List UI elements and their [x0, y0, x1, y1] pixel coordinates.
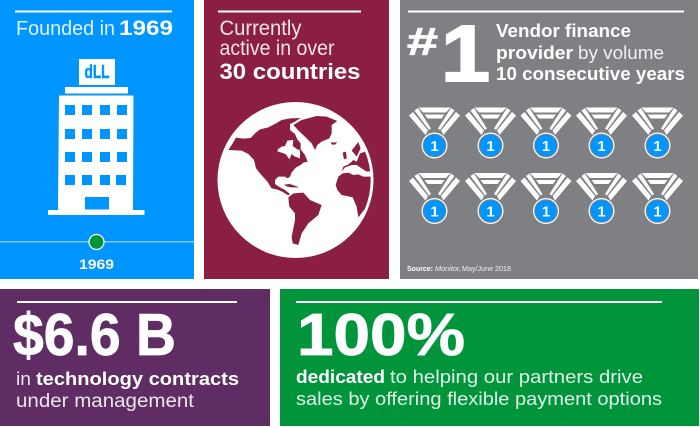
icon: building with logo	[48, 59, 144, 215]
heading: founded in 1969	[16, 16, 173, 40]
medal 9	[576, 173, 627, 224]
timeline marker	[0, 234, 194, 250]
big number: 6.6 billion: $6.6 B	[13, 302, 176, 368]
timeline year: 1969	[79, 256, 114, 272]
icon: building with logo: dLL	[84, 62, 110, 82]
medal 1	[409, 108, 460, 158]
large number one: #	[407, 21, 438, 64]
medal 4: 1	[597, 138, 606, 155]
heading: currently active in over 30 countries: active in over	[220, 37, 334, 60]
large number one	[407, 9, 490, 98]
heading: currently active in over 30 countries: 30 countries	[220, 59, 360, 84]
text: technology contracts under management: technology contracts	[36, 368, 239, 389]
source note	[407, 266, 511, 273]
text: dedicated to helping partners: sales by offering flexible payment options	[296, 388, 662, 409]
medal 4	[576, 108, 627, 158]
text: vendor finance provider: provider	[496, 43, 573, 63]
source note: Source:	[407, 266, 433, 273]
text: vendor finance provider: by volume	[578, 43, 664, 63]
medal 2: 1	[486, 138, 495, 155]
panel: 100 percent dedicated	[280, 289, 699, 426]
panel: active in 30 countries	[204, 0, 389, 279]
text: vendor finance provider: Vendor finance	[496, 21, 631, 41]
source note: Monitor,	[435, 266, 461, 273]
panel: technology contracts	[0, 289, 270, 426]
medal 8	[520, 173, 572, 224]
heading: currently active in over 30 countries	[220, 17, 360, 84]
medal 5	[632, 108, 683, 158]
text: dedicated to helping partners: dedicated	[296, 366, 385, 387]
medal 8: 1	[542, 204, 550, 220]
medal 6: 1	[430, 204, 439, 220]
text: dedicated to helping partners: to helping our partners drive	[390, 366, 643, 387]
medal 5: 1	[653, 138, 662, 155]
medal 2	[465, 108, 516, 158]
text: technology contracts under management: under management	[16, 391, 195, 412]
source note: May/June 2018	[462, 266, 511, 273]
medal 9: 1	[597, 204, 606, 220]
medal 6	[409, 173, 460, 224]
medal 3: 1	[542, 138, 550, 155]
panel: number one vendor finance	[400, 0, 698, 279]
medal 7	[465, 173, 516, 224]
panel: founded in 1969	[0, 0, 194, 279]
medal 3	[520, 108, 572, 158]
medals: ten awards	[409, 108, 683, 224]
icon: globe	[218, 102, 374, 258]
medal 7: 1	[486, 204, 495, 220]
large number one: 1	[441, 9, 490, 98]
text: technology contracts under management: in	[16, 368, 31, 389]
heading: founded in 1969: Founded in	[16, 17, 115, 40]
text: vendor finance provider	[496, 21, 685, 84]
text: technology contracts under management	[16, 368, 239, 412]
heading: founded in 1969: 1969	[119, 16, 173, 40]
text: dedicated to helping partners	[296, 366, 662, 409]
medal 1: 1	[430, 138, 439, 155]
text: vendor finance provider: 10 consecutive years	[496, 64, 685, 84]
heading: currently active in over 30 countries: Currently	[220, 17, 302, 40]
medal 10: 1	[653, 204, 662, 220]
medal 10	[632, 173, 683, 224]
big number: 100 percent: 100%	[297, 302, 465, 368]
